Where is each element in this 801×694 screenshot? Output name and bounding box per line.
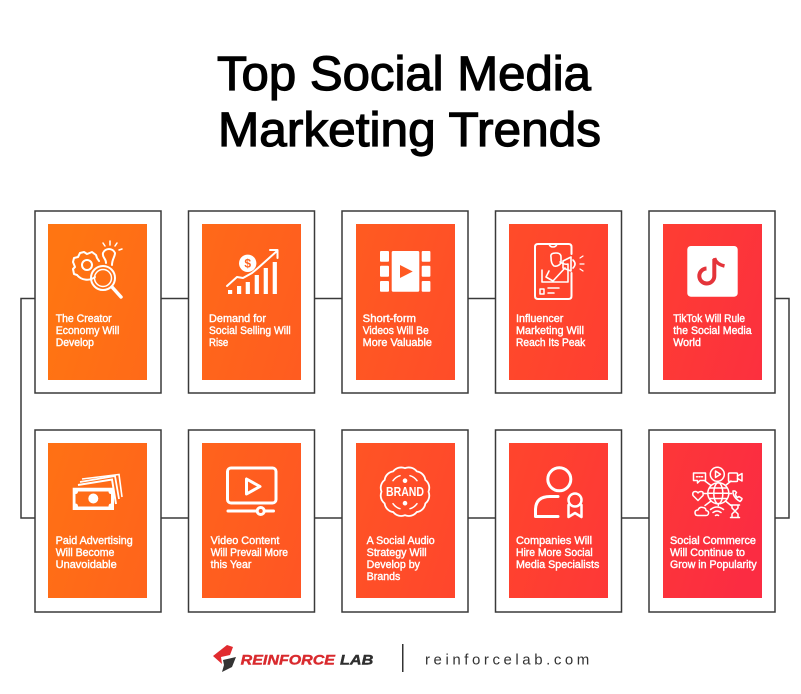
title xyxy=(217,48,601,157)
icon: video player xyxy=(228,468,276,514)
label xyxy=(211,535,288,571)
label: More Valuable xyxy=(363,337,432,349)
icon: brand badge xyxy=(381,467,429,516)
icon: brand badge: BRAND xyxy=(386,485,424,499)
label xyxy=(56,535,133,571)
label: Videos Will Be xyxy=(363,325,429,337)
label: World xyxy=(673,337,701,349)
label: Marketing Will xyxy=(516,325,584,337)
label: Will Become xyxy=(56,547,114,559)
label xyxy=(209,313,291,349)
label: this Year xyxy=(211,559,252,571)
icon: logo mark xyxy=(213,645,236,672)
label: Will Prevail More xyxy=(211,547,288,559)
panel: The Creator Economy Will Develop xyxy=(35,211,161,393)
panel: Companies Will Hire More Social Media Specialists xyxy=(496,430,622,612)
label: Demand for xyxy=(209,313,266,325)
label: Develop by xyxy=(367,559,421,571)
icon: TikTok logo xyxy=(687,246,738,297)
icon: phone with influencer and megaphone xyxy=(535,244,584,299)
footer logo: Reinforce Lab xyxy=(213,645,373,672)
label xyxy=(363,313,432,349)
label xyxy=(670,535,757,571)
label: Develop xyxy=(56,337,94,349)
label xyxy=(56,313,119,349)
label: Reach Its Peak xyxy=(516,337,586,349)
label: The Creator xyxy=(56,313,112,325)
label: Unavoidable xyxy=(56,559,117,571)
label: the Social Media xyxy=(673,325,752,337)
label: Rise xyxy=(209,337,228,349)
icon: stack of banknotes xyxy=(73,474,122,510)
footer website: reinforcelab.com xyxy=(425,651,589,668)
label: Paid Advertising xyxy=(56,535,133,547)
icon: rising bars with coin: $ xyxy=(244,256,251,270)
footer divider xyxy=(402,644,404,672)
label: Economy Will xyxy=(56,325,119,337)
label: TikTok Will Rule xyxy=(673,313,745,325)
label: Short-form xyxy=(363,313,416,325)
footer logo: Reinforce Lab: LAB xyxy=(340,651,373,667)
label: Media Specialists xyxy=(516,559,599,571)
connector lines xyxy=(21,298,789,518)
label xyxy=(367,535,435,583)
label: Strategy Will xyxy=(367,547,427,559)
label: Video Content xyxy=(211,535,279,547)
panel: A Social Audio Strategy Will Develop by Brands xyxy=(342,430,468,612)
title: Marketing Trends xyxy=(218,104,601,157)
label: Social Commerce xyxy=(670,535,756,547)
panel: Influencer Marketing Will Reach Its Peak xyxy=(496,211,622,393)
panel: Social Commerce Will Continue to Grow in Popularity xyxy=(649,430,775,612)
label: Social Selling Will xyxy=(209,325,291,337)
icon: rising bars with coin xyxy=(227,250,278,294)
label: Companies Will xyxy=(516,535,592,547)
panel: Short-form Videos Will Be More Valuable xyxy=(342,211,468,393)
label: Influencer xyxy=(516,313,564,325)
label: Hire More Social xyxy=(516,547,593,559)
panel: Demand for Social Selling Will Rise xyxy=(188,211,314,393)
label xyxy=(673,313,752,349)
label: Brands xyxy=(367,571,400,583)
panel: TikTok Will Rule the Social Media World xyxy=(649,211,775,393)
label xyxy=(516,313,586,349)
label: A Social Audio xyxy=(367,535,435,547)
label xyxy=(516,535,599,571)
icon: person with award ribbon xyxy=(536,468,582,517)
icon: globe with social symbols xyxy=(693,467,742,518)
icon: gear, magnifier and bulb xyxy=(73,241,122,297)
title: Top Social Media xyxy=(217,48,591,101)
icon: film strip with play button xyxy=(380,251,430,292)
panel: Video Content Will Prevail More this Year xyxy=(188,430,314,612)
label: Will Continue to xyxy=(670,547,745,559)
footer logo: Reinforce Lab: REINFORCE xyxy=(241,651,336,667)
panel: Paid Advertising Will Become Unavoidable xyxy=(35,430,161,612)
label: Grow in Popularity xyxy=(670,559,757,571)
